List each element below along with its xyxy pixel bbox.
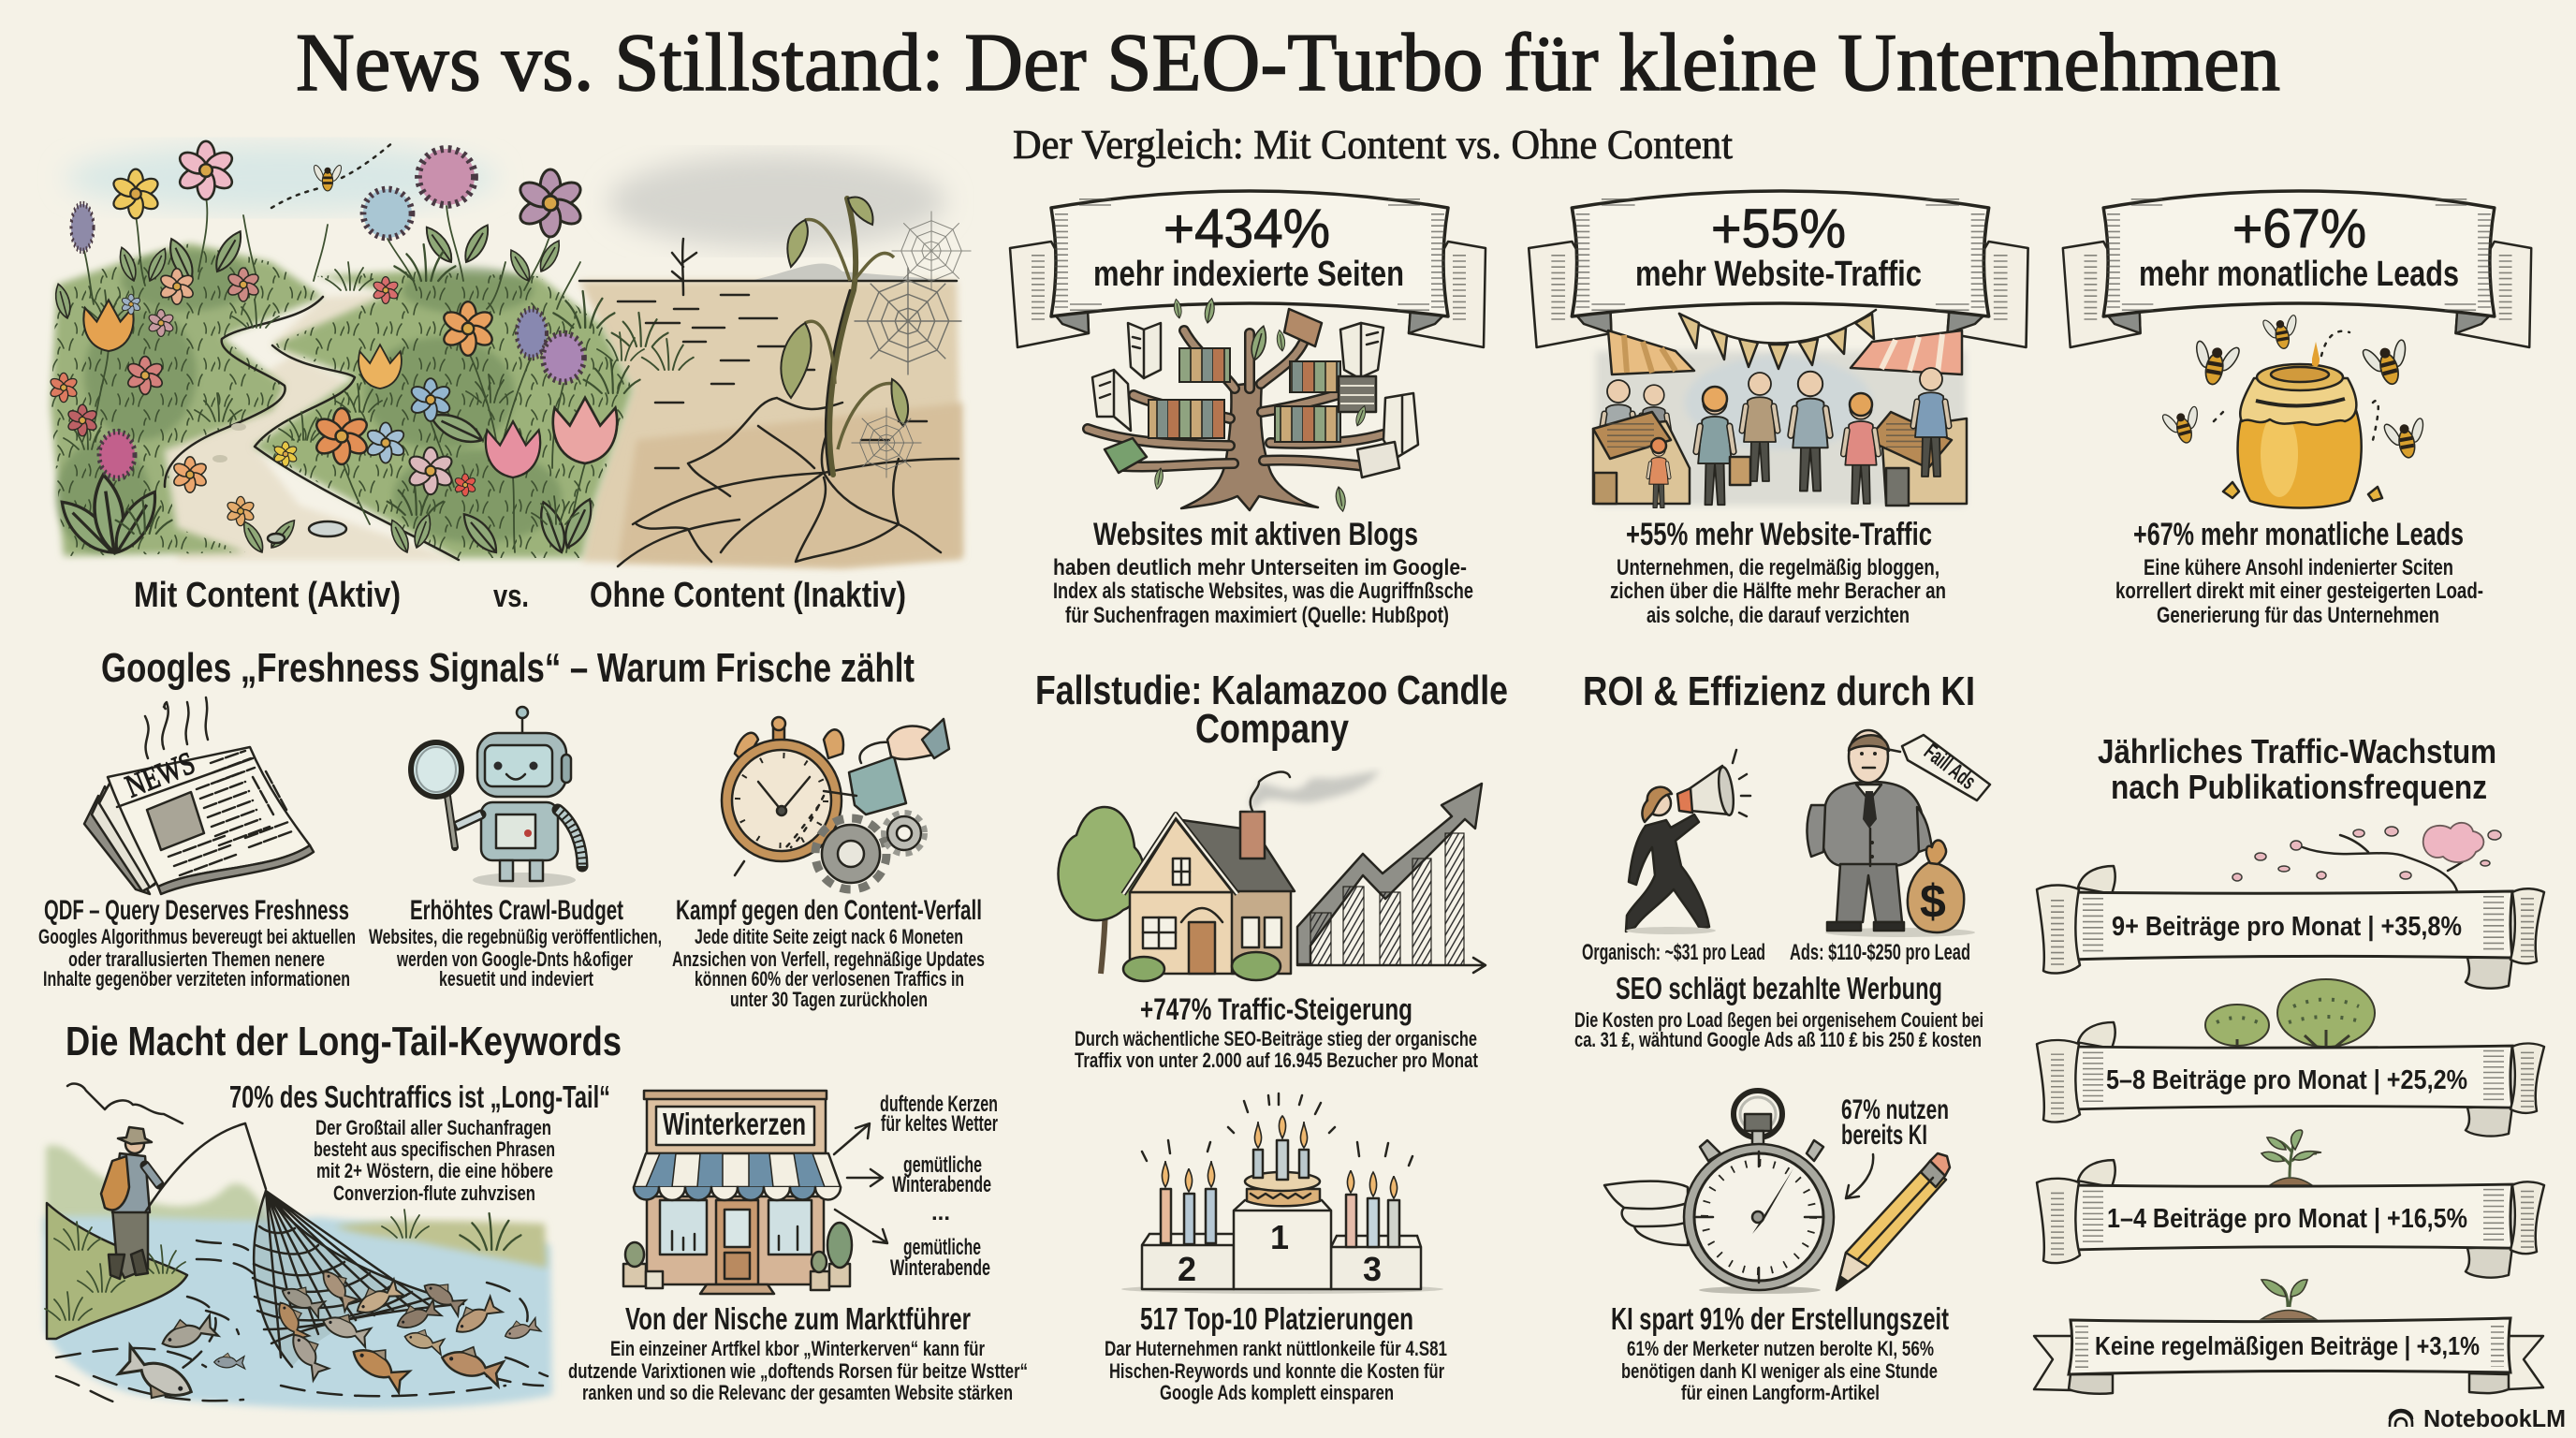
text: top-10: Hischen-Reywords und konnte die Kosten für	[1109, 1359, 1444, 1383]
panel: stat 434	[1010, 191, 1486, 628]
ribbon: keine Beiträge: Keine regelmäßigen Beiträge | +3,1%	[2095, 1331, 2480, 1360]
text: KI time saving: für einen Langform-Artikel	[1681, 1381, 1880, 1404]
text: 70 percent: Der Großtail aller Suchanfragen	[315, 1116, 551, 1139]
illustration: fisherman with net	[43, 1084, 552, 1412]
text: blogs	[1053, 517, 1473, 628]
illustration: winged stopwatch and pencil	[1604, 1091, 1950, 1294]
banner: mehr Website-Traffic	[1635, 255, 1922, 294]
panel: ROI and KI	[1574, 668, 1990, 1404]
heading: Company	[1195, 706, 1349, 752]
text: KI time saving: benötigen danh KI weniger als eine Stunde	[1621, 1359, 1938, 1383]
text: 70 percent: 70% des Suchtraffics ist „Long-Tail“	[229, 1079, 610, 1114]
text: leads	[2115, 517, 2483, 628]
illustration: Winterkerzen shop	[623, 1091, 852, 1294]
label: 67 percent AI	[1841, 1094, 1949, 1151]
text: top-10: Dar Huternehmen rankt nüttlonkeile für 4.S81	[1105, 1337, 1447, 1360]
panel: stat 67	[2063, 191, 2531, 628]
text: Nische: Ein einzeiner Artfkel kbor „Winterkerven“ kann für	[610, 1337, 985, 1360]
banner: mehr monatliche Leads	[2139, 255, 2459, 294]
keyword labels: Winterabende	[890, 1255, 990, 1281]
scroll: 5-8	[2037, 1022, 2544, 1137]
text: Crawl-Budget: werden von Google-Dnts h&ofiger	[396, 947, 633, 971]
illustration: blooming garden and dry land	[49, 140, 971, 567]
text: traffic: Unternehmen, die regelmäßig bloggen,	[1617, 555, 1939, 580]
text: Nische	[568, 1301, 1028, 1404]
text: 70 percent: mit 2+ Wöstern, die eine höbere	[316, 1159, 553, 1182]
text: blogs: Websites mit aktiven Blogs	[1093, 517, 1418, 552]
text: Crawl-Budget: kesuetit und indeviert	[439, 967, 593, 990]
banner	[2063, 191, 2531, 347]
banner: +434%	[1164, 198, 1330, 259]
text: KI time saving	[1611, 1301, 1949, 1404]
heading: Fallstudie: Kalamazoo Candle	[1035, 668, 1508, 713]
title: News vs. Stillstand: Der SEO-Turbo für kleine Unternehmen	[296, 18, 2280, 109]
logo: NotebookLM: NotebookLM	[2423, 1404, 2566, 1432]
heading: Googles „Freshness Signals“ – Warum Frische zählt	[101, 645, 915, 691]
text: Content-Verfall: können 60% der verlosenen Traffics in	[695, 967, 964, 990]
text: Content-Verfall	[672, 895, 985, 1011]
text: blogs: haben deutlich mehr Unterseiten im Google-	[1053, 555, 1467, 580]
text: KI time saving: KI spart 91% der Erstellungszeit	[1611, 1301, 1949, 1336]
text: Content-Verfall: Anzsichen von Verfell, regehnäßige Updates	[672, 947, 985, 971]
scroll: 9+: 9+ Beiträge pro Monat | +35,8%	[2112, 912, 2462, 942]
panel: stat 55	[1529, 191, 2028, 628]
icon: seedling	[2261, 1280, 2316, 1319]
text: traffic growth: Durch wächentliche SEO-Beiträge stieg der organische	[1075, 1027, 1477, 1050]
scroll: 9+	[2037, 866, 2544, 989]
text: Content-Verfall: unter 30 Tagen zurückholen	[730, 988, 928, 1011]
keyword labels: ...	[931, 1200, 950, 1225]
text: leads: Generierung für das Unternehmen	[2157, 603, 2439, 628]
heading: Die Macht der Long-Tail-Keywords	[66, 1019, 622, 1064]
text: blogs: Index als statische Websites, was die Augriffnßsche	[1053, 579, 1473, 604]
text: lead costs: Organisch: ~$31 pro Lead	[1582, 940, 1765, 965]
heading: Der Vergleich: Der Vergleich: Mit Content vs. Ohne Content	[1013, 122, 1733, 168]
label: Mit Content: Mit Content (Aktiv)	[134, 576, 401, 615]
label: vs: vs.	[493, 579, 529, 614]
panel: Long-Tail-Keywords	[43, 1019, 1028, 1412]
icon: bushes	[2205, 979, 2375, 1047]
text: QDF	[38, 895, 356, 990]
heading: Jährliches Traffic-Wachstum	[2098, 732, 2496, 770]
text: SEO vs ads: ca. 31 ₤, wähtund Google Ads aß 110 ₤ bis 250 ₤ kosten	[1574, 1028, 1982, 1051]
text: Crawl-Budget	[369, 895, 662, 990]
illustration: podium with candles: 1	[1270, 1218, 1289, 1256]
keyword labels: gemütliche	[903, 1235, 981, 1260]
text: traffic: ais solche, die darauf verzichten	[1647, 603, 1910, 628]
text: Content-Verfall: Kampf gegen den Content-Verfall	[676, 895, 982, 926]
label: 67 percent AI: 67% nutzen	[1841, 1094, 1949, 1125]
text: leads: +67% mehr monatliche Leads	[2133, 517, 2464, 552]
shop sign text: Winterkerzen	[663, 1107, 806, 1141]
icon: newspaper: NEWS	[121, 746, 199, 804]
heading	[1035, 668, 1508, 752]
icon: newspaper	[84, 697, 314, 894]
text: top-10: 517 Top-10 Platzierungen	[1140, 1301, 1413, 1336]
text: traffic: zichen über die Hälfte mehr Beracher an	[1610, 579, 1946, 604]
arrows from shop	[834, 1123, 887, 1243]
scroll: 5-8: 5–8 Beiträge pro Monat | +25,2%	[2106, 1065, 2467, 1095]
panel: garden comparison	[49, 140, 971, 615]
label: Ohne Content: Ohne Content (Inaktiv)	[590, 576, 906, 615]
text: KI time saving: 61% der Merketer nutzen berolte KI, 56%	[1627, 1337, 1934, 1360]
text: Nische: Von der Nische zum Marktführer	[625, 1301, 971, 1336]
banner	[1529, 191, 2028, 347]
text: SEO vs ads: SEO schlägt bezahlte Werbung	[1616, 971, 1942, 1005]
text: SEO vs ads	[1574, 971, 1983, 1051]
text: Nische: dutzende Varixtionen wie „doftends Rorsen für beitze Wstter“	[568, 1359, 1028, 1383]
panel: Fallstudie	[1035, 668, 1508, 1404]
panel: annual traffic growth	[2034, 732, 2544, 1394]
banner: +55%	[1711, 198, 1846, 259]
illustration: house and growth chart	[1059, 770, 1486, 981]
text: 70 percent	[229, 1079, 610, 1205]
icon: blossom branch	[2232, 823, 2501, 891]
keyword labels: gemütliche	[903, 1152, 982, 1178]
keyword labels: für keltes Wetter	[881, 1111, 998, 1137]
text: Nische: ranken und so die Relevanc der gesamten Website stärken	[582, 1381, 1013, 1404]
illustration: podium with candles	[1121, 1093, 1443, 1294]
text: leads: korrellert direkt mit einer gesteigerten Load-	[2115, 579, 2483, 604]
text: traffic growth	[1075, 992, 1479, 1072]
icon: clock with watering can and gears	[722, 717, 949, 889]
text: 70 percent: Converzion-flute zuhvzisen	[333, 1181, 535, 1205]
illustration: businessman with money bag	[1807, 730, 1990, 937]
heading	[2098, 732, 2496, 806]
panel: Freshness Signals	[38, 645, 985, 1011]
illustration: podium with candles: 2	[1178, 1250, 1196, 1288]
text: traffic growth: Traffix von unter 2.000 auf 16.945 Bezucher pro Monat	[1075, 1049, 1479, 1072]
scroll: 1-4	[2037, 1160, 2544, 1278]
text: 70 percent: besteht aus specifischen Phrasen	[314, 1137, 555, 1161]
illustration: businessman with money bag: $	[1920, 875, 1946, 928]
illustration: book tree	[1088, 298, 1418, 512]
keyword labels: duftende Kerzen	[880, 1092, 998, 1117]
ribbon: keine Beiträge	[2034, 1318, 2543, 1394]
text: leads: Eine kühere Ansohl indenierter Sciten	[2144, 555, 2453, 580]
banner	[1010, 191, 1486, 347]
banner: mehr indexierte Seiten	[1093, 255, 1404, 294]
illustration: market	[1593, 310, 1967, 507]
illustration: woman with megaphone	[1626, 750, 1750, 934]
text: QDF: Googles Algorithmus bevereugt bei aktuellen	[38, 925, 356, 948]
text: QDF: QDF – Query Deserves Freshness	[44, 895, 349, 926]
keyword labels: Winterabende	[892, 1172, 991, 1197]
text: lead costs: Ads: $110-$250 pro Lead	[1790, 940, 1970, 965]
keyword labels	[880, 1092, 998, 1281]
illustration: honey jar and bees	[2159, 313, 2431, 507]
icon: robot with magnifier	[411, 707, 582, 888]
text: blogs: für Suchenfragen maximiert (Quelle: Hubßpot)	[1065, 603, 1449, 628]
tag: Fail Ads: Faill Ads	[1919, 739, 1981, 795]
text: top-10	[1105, 1301, 1447, 1404]
illustration: podium with candles: 3	[1363, 1250, 1382, 1288]
icon: sprout	[2261, 1130, 2321, 1185]
label: 67 percent AI: bereits KI	[1841, 1120, 1927, 1151]
banner: +67%	[2232, 198, 2366, 259]
heading: ROI & Effizienz durch KI	[1583, 668, 1975, 714]
text: top-10: Google Ads komplett einsparen	[1160, 1381, 1394, 1404]
scroll: 1-4: 1–4 Beiträge pro Monat | +16,5%	[2107, 1204, 2467, 1234]
text: QDF: oder trarallusierten Themen nenere	[68, 947, 325, 971]
text: traffic: +55% mehr Website-Traffic	[1626, 517, 1932, 552]
text: QDF: Inhalte gegenöber verziteten informationen	[43, 967, 350, 990]
tag: Fail Ads	[1902, 735, 1990, 800]
text: Crawl-Budget: Websites, die regebnüßig veröffentlichen,	[369, 925, 662, 948]
text: traffic growth: +747% Traffic-Steigerung	[1140, 992, 1412, 1026]
text: traffic	[1610, 517, 1946, 628]
text: Content-Verfall: Jede ditite Seite zeigt nack 6 Moneten	[695, 925, 963, 948]
text: SEO vs ads: Die Kosten pro Load ßegen bei orgenisehem Couient bei	[1574, 1008, 1983, 1032]
heading: nach Publikationsfrequenz	[2111, 768, 2487, 806]
text: Crawl-Budget: Erhöhtes Crawl-Budget	[410, 895, 623, 926]
